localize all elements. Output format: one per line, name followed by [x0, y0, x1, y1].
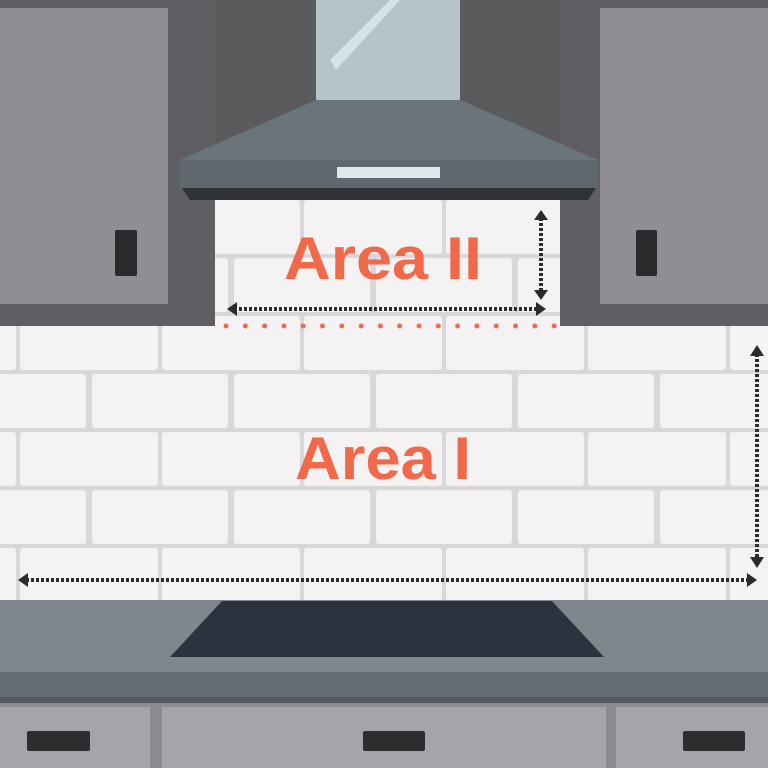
lower cabinets [0, 703, 768, 768]
Area I height arrow [750, 345, 764, 568]
right upper cabinet [560, 0, 768, 326]
right cabinet handle [636, 230, 657, 276]
left upper cabinet [0, 0, 215, 326]
range hood [180, 0, 598, 200]
Area II height arrow [534, 210, 548, 300]
Area II label: Area II [284, 225, 482, 292]
drawer handles [27, 731, 90, 751]
left cabinet handle [115, 230, 137, 276]
orange dotted boundary line [226, 324, 556, 328]
Area I label: Area I [295, 425, 471, 492]
countertop with cooktop [0, 600, 768, 703]
hood chimney back [215, 0, 560, 200]
Area II width arrow [227, 302, 546, 316]
Area I width arrow [18, 573, 757, 587]
tiled wall [0, 0, 768, 600]
